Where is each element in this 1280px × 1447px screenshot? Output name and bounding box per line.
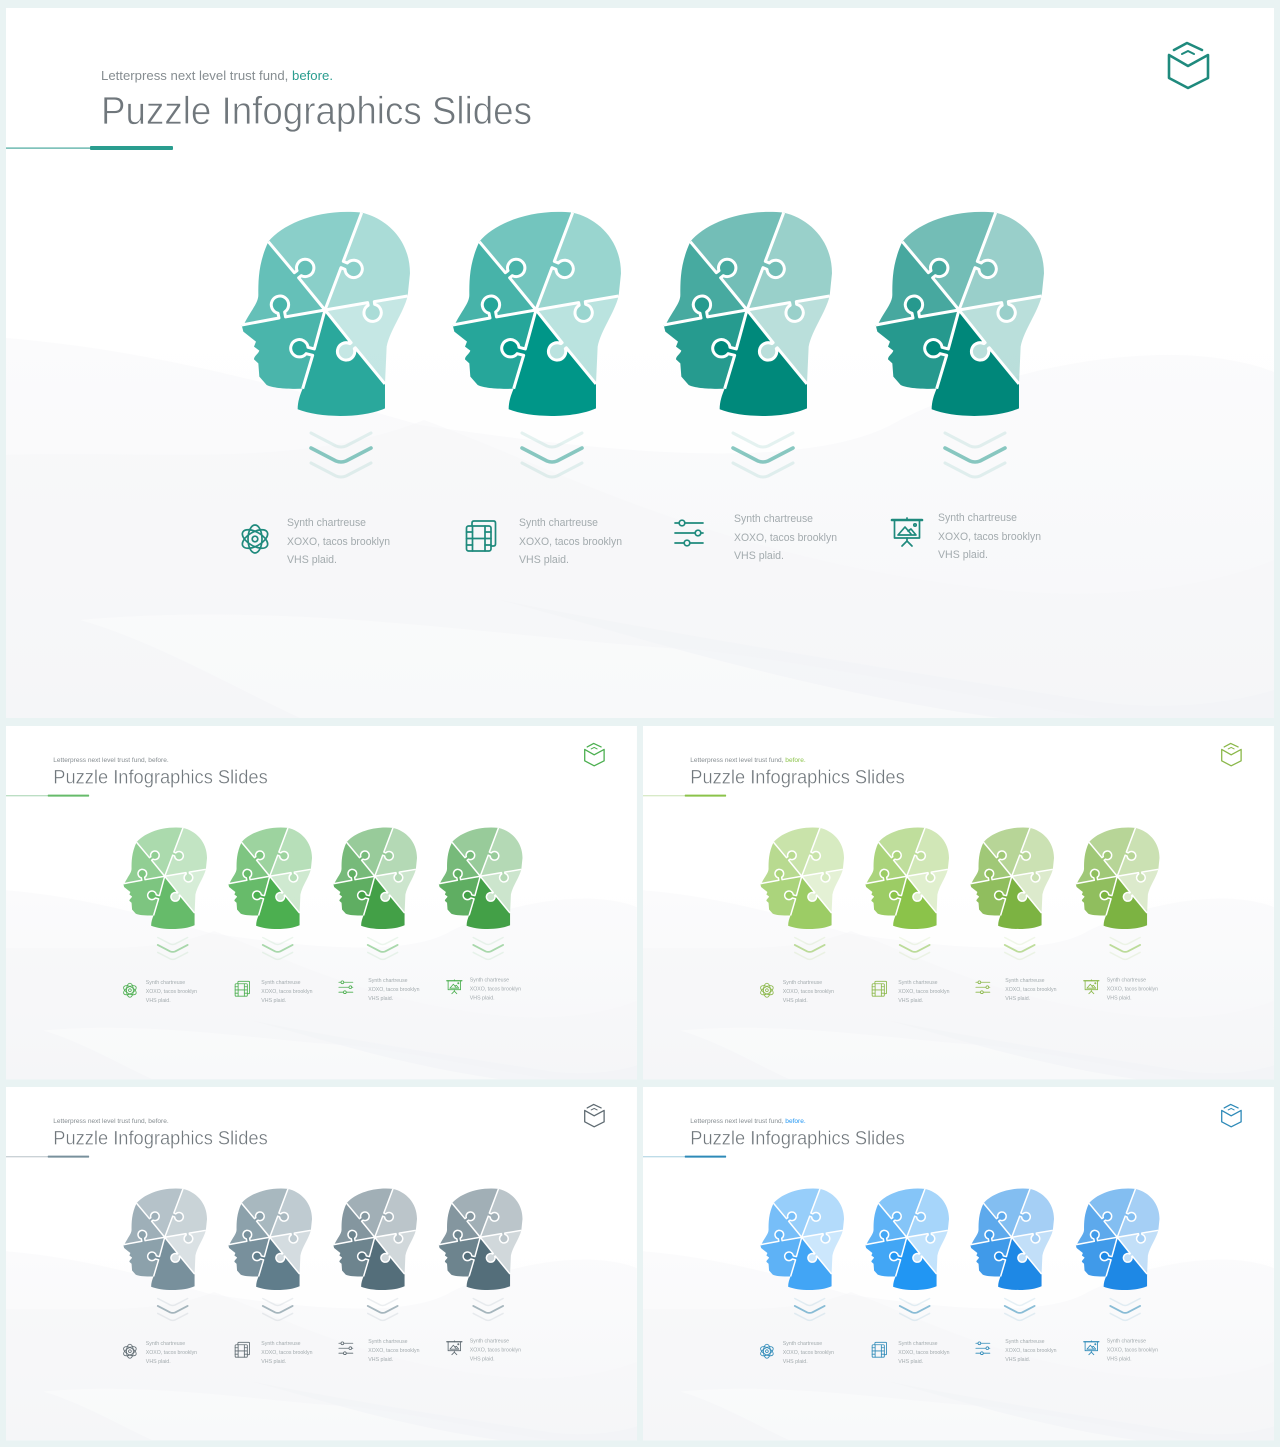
text block 1 light green: Synth chartreuse	[783, 980, 822, 986]
icon: atom green	[122, 983, 138, 997]
text block 3 light green	[1005, 978, 1057, 1002]
text block 4 green	[470, 977, 521, 1002]
text block 3 grey	[368, 1339, 420, 1363]
green puzzle head 2	[228, 827, 312, 929]
blue puzzle head 1	[760, 1188, 844, 1290]
icon: sliders light green	[976, 981, 990, 994]
text block 2 green	[261, 980, 313, 1004]
blue puzzle head 2	[865, 1188, 949, 1290]
icon: presentation board grey	[447, 1341, 462, 1355]
icon: presentation board light green	[1084, 980, 1099, 994]
panel: large teal slide	[6, 8, 1274, 718]
text block 2 light green	[898, 980, 950, 1004]
text block 2 green: VHS plaid.	[261, 998, 287, 1004]
text block 1 green: Synth chartreuse	[146, 980, 185, 986]
icon: cube logo	[1169, 43, 1208, 88]
text block 1 green: VHS plaid.	[146, 998, 171, 1004]
text block 1	[287, 517, 390, 566]
light green puzzle head 3	[970, 827, 1054, 929]
icon: atom blue	[759, 1344, 775, 1358]
heading underline: blue	[643, 1156, 726, 1158]
text block 2 light green: VHS plaid.	[898, 998, 924, 1004]
chevrons row	[311, 433, 1005, 477]
text block 1 grey: VHS plaid.	[146, 1359, 171, 1365]
text block 3 green: XOXO, tacos brooklyn	[368, 987, 420, 993]
heading: grey slide	[53, 1118, 268, 1150]
icon: presentation board	[892, 518, 922, 546]
text block 1: VHS plaid.	[287, 554, 337, 566]
grey puzzle head 3	[333, 1188, 417, 1290]
text block 3 blue: VHS plaid.	[1005, 1357, 1031, 1363]
text block 2 blue: XOXO, tacos brooklyn	[898, 1350, 950, 1356]
heading: light green slide: Puzzle Infographics Slides	[690, 767, 905, 789]
blue puzzle head 3	[970, 1188, 1054, 1290]
text block 3 grey: Synth chartreuse	[368, 1339, 408, 1345]
grey puzzle head 4	[439, 1188, 522, 1290]
blue puzzle head 4	[1076, 1188, 1159, 1290]
icon: presentation board blue	[1084, 1341, 1099, 1355]
panel: grey slide	[6, 1087, 637, 1440]
heading underline: green	[6, 795, 89, 797]
grey puzzle head 2	[228, 1188, 312, 1290]
text block 3 blue: Synth chartreuse	[1005, 1339, 1045, 1345]
text block 3 green: Synth chartreuse	[368, 978, 408, 984]
text block 4 light green: VHS plaid.	[1107, 996, 1132, 1002]
text block 1 green	[146, 980, 197, 1004]
text block 4: Synth chartreuse	[938, 512, 1017, 524]
heading: teal slide	[101, 68, 532, 133]
text block 2 blue: Synth chartreuse	[898, 1341, 938, 1347]
text block 3 blue	[1005, 1339, 1057, 1363]
text block 2 grey	[261, 1341, 313, 1365]
text block 1 blue: Synth chartreuse	[783, 1341, 822, 1347]
text block 3 light green: VHS plaid.	[1005, 996, 1031, 1002]
text block 3 light green: Synth chartreuse	[1005, 978, 1045, 984]
text block 1 light green	[783, 980, 834, 1004]
icon: film frames green	[235, 981, 250, 996]
text block 3 green	[368, 978, 420, 1002]
text block 3	[734, 513, 837, 562]
panel: green slide	[6, 726, 637, 1079]
green puzzle head 4	[439, 827, 522, 929]
text block 2 light green: Synth chartreuse	[898, 980, 938, 986]
text block 4	[938, 512, 1041, 561]
text block 4 green: VHS plaid.	[470, 996, 495, 1002]
icon: atom	[239, 525, 271, 553]
text block 4: XOXO, tacos brooklyn	[938, 531, 1041, 543]
icon: sliders blue	[976, 1342, 990, 1355]
text block 2 grey: Synth chartreuse	[261, 1341, 301, 1347]
heading: blue slide: Letterpress next level trust fund, before.	[690, 1118, 806, 1125]
icon: film frames	[466, 521, 496, 551]
heading underline: light green	[643, 795, 726, 797]
light green puzzle head 2	[865, 827, 949, 929]
text block 3: XOXO, tacos brooklyn	[734, 532, 837, 544]
text block 4 grey: VHS plaid.	[470, 1357, 495, 1363]
heading: green slide	[53, 757, 268, 789]
text block 1: XOXO, tacos brooklyn	[287, 536, 390, 548]
text block 2 green: Synth chartreuse	[261, 980, 301, 986]
text block 2 grey: VHS plaid.	[261, 1359, 287, 1365]
text block 1 green: XOXO, tacos brooklyn	[146, 989, 197, 995]
text block 4 blue: XOXO, tacos brooklyn	[1107, 1348, 1158, 1354]
heading: green slide: Letterpress next level trust fund, before.	[53, 757, 169, 764]
text block 3 grey: XOXO, tacos brooklyn	[368, 1348, 420, 1354]
grey puzzle head 1	[123, 1188, 207, 1290]
icon: cube logo grey	[585, 1104, 604, 1127]
icon: sliders green	[339, 981, 353, 994]
text block 4 light green: Synth chartreuse	[1107, 977, 1146, 983]
text block 2: Synth chartreuse	[519, 517, 598, 529]
heading: green slide: Puzzle Infographics Slides	[53, 767, 268, 789]
text block 4 grey: Synth chartreuse	[470, 1338, 509, 1344]
text block 3 grey: VHS plaid.	[368, 1357, 394, 1363]
text block 2: XOXO, tacos brooklyn	[519, 536, 622, 548]
icon: atom grey	[122, 1344, 138, 1358]
text block 4 green: XOXO, tacos brooklyn	[470, 987, 521, 993]
text block 1 blue: XOXO, tacos brooklyn	[783, 1350, 834, 1356]
icon: cube logo green	[585, 743, 604, 766]
heading: teal slide: Puzzle Infographics Slides	[101, 90, 532, 133]
puzzle head 4	[876, 212, 1044, 416]
text block 2 grey: XOXO, tacos brooklyn	[261, 1350, 313, 1356]
text block 3 light green: XOXO, tacos brooklyn	[1005, 987, 1057, 993]
green puzzle head 3	[333, 827, 417, 929]
text block 2 light green: XOXO, tacos brooklyn	[898, 989, 950, 995]
puzzle head 3	[664, 212, 832, 416]
text block 4 grey: XOXO, tacos brooklyn	[470, 1348, 521, 1354]
text block 3 blue: XOXO, tacos brooklyn	[1005, 1348, 1057, 1354]
text block 4 grey	[470, 1338, 521, 1363]
text block 4 light green	[1107, 977, 1158, 1002]
text block 1 grey: Synth chartreuse	[146, 1341, 185, 1347]
text block 3: Synth chartreuse	[734, 513, 813, 525]
text block 2 green: XOXO, tacos brooklyn	[261, 989, 313, 995]
heading underline: grey	[6, 1156, 89, 1158]
icon: cube logo blue	[1222, 1104, 1241, 1127]
text block 4 green: Synth chartreuse	[470, 977, 509, 983]
icon: sliders	[675, 520, 703, 546]
heading: light green slide	[690, 757, 905, 789]
icon: film frames blue	[872, 1342, 887, 1357]
chevrons row blue	[795, 1298, 1140, 1320]
text block 2: VHS plaid.	[519, 554, 569, 566]
text block 4 blue: Synth chartreuse	[1107, 1338, 1146, 1344]
text block 1 grey	[146, 1341, 197, 1365]
text block 3: VHS plaid.	[734, 550, 784, 562]
icon: film frames grey	[235, 1342, 250, 1357]
text block 1 blue: VHS plaid.	[783, 1359, 808, 1365]
text block 1 light green: VHS plaid.	[783, 998, 808, 1004]
text block 3 green: VHS plaid.	[368, 996, 394, 1002]
green puzzle head 1	[123, 827, 207, 929]
text block 4 light green: XOXO, tacos brooklyn	[1107, 987, 1158, 993]
heading: grey slide: Letterpress next level trust fund, before.	[53, 1118, 169, 1125]
chevrons row green	[158, 937, 503, 959]
light green puzzle head 1	[760, 827, 844, 929]
heading: grey slide: Puzzle Infographics Slides	[53, 1128, 268, 1150]
text block 4 blue	[1107, 1338, 1158, 1363]
icon: cube logo light green	[1222, 743, 1241, 766]
text block 1 blue	[783, 1341, 834, 1365]
panel: blue slide	[643, 1087, 1274, 1440]
chevrons row grey	[158, 1298, 503, 1320]
icon: presentation board green	[447, 980, 462, 994]
icon: atom light green	[759, 983, 775, 997]
heading: blue slide	[690, 1118, 905, 1150]
text block 2 blue	[898, 1341, 950, 1365]
light green puzzle head 4	[1076, 827, 1159, 929]
heading underline: teal	[6, 146, 173, 150]
text block 4: VHS plaid.	[938, 549, 988, 561]
icon: film frames light green	[872, 981, 887, 996]
chevrons row light green	[795, 937, 1140, 959]
heading: light green slide: Letterpress next level trust fund, before.	[690, 757, 806, 764]
puzzle head 1	[242, 212, 410, 416]
panel: light green slide	[643, 726, 1274, 1079]
heading: teal slide: Letterpress next level trust fund, before.	[101, 68, 333, 83]
heading: blue slide: Puzzle Infographics Slides	[690, 1128, 905, 1150]
puzzle head 2	[453, 212, 621, 416]
icon: sliders grey	[339, 1342, 353, 1355]
text block 1 light green: XOXO, tacos brooklyn	[783, 989, 834, 995]
text block 1 grey: XOXO, tacos brooklyn	[146, 1350, 197, 1356]
text block 1: Synth chartreuse	[287, 517, 366, 529]
text block 2	[519, 517, 622, 566]
text block 4 blue: VHS plaid.	[1107, 1357, 1132, 1363]
text block 2 blue: VHS plaid.	[898, 1359, 924, 1365]
